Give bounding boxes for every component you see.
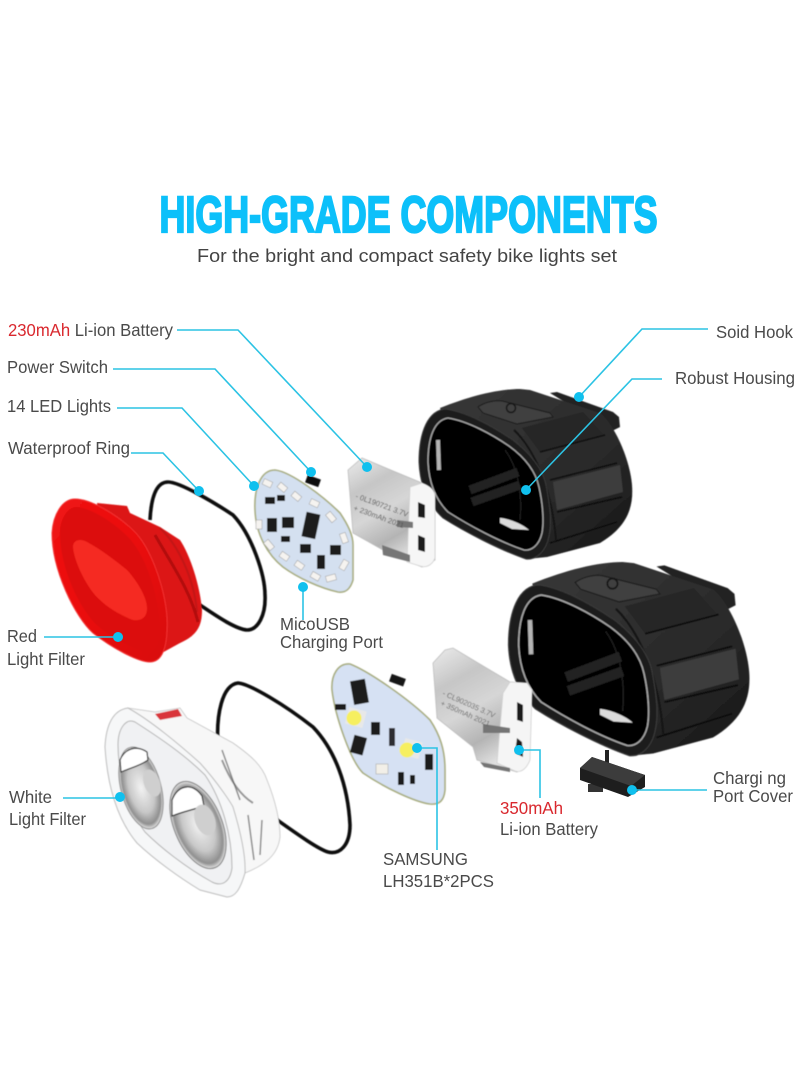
white light filter bbox=[105, 708, 280, 897]
label: 350mAh Li-ion Battery: 350mAh bbox=[500, 798, 563, 818]
label: Waterproof Ring: Waterproof Ring bbox=[8, 438, 130, 458]
label: Samsung LED: SAMSUNG bbox=[383, 849, 468, 869]
callout dots bbox=[113, 392, 637, 802]
circuit board: 14 LED bbox=[255, 470, 353, 592]
label: MicoUSB Charging Port bbox=[280, 614, 383, 652]
red light filter bbox=[52, 499, 202, 662]
waterproof ring: red light bbox=[150, 482, 265, 630]
housing: upper black bbox=[419, 389, 632, 559]
leader lines bbox=[44, 329, 708, 850]
label: Charging Port Cover: Port Cover bbox=[713, 786, 793, 806]
charging port cover bbox=[580, 750, 645, 797]
label: 14 LED Lights: 14 LED Lights bbox=[7, 396, 111, 416]
label: 350mAh Li-ion Battery bbox=[500, 798, 598, 839]
label: 230mAh Li-ion Battery: 230mAh Li-ion Battery bbox=[8, 320, 173, 340]
subtitle: For the bright and compact safety bike lights set bbox=[197, 245, 617, 266]
battery: 230mAh: + 230mAh 2021 bbox=[352, 503, 405, 530]
label: Red Light Filter: Red bbox=[7, 626, 37, 646]
label: MicoUSB Charging Port: MicoUSB bbox=[280, 614, 350, 634]
label: MicoUSB Charging Port: Charging Port bbox=[280, 632, 383, 652]
battery: 230mAh: - 0L190721 3.7V bbox=[354, 491, 410, 519]
label: Charging Port Cover bbox=[713, 768, 793, 806]
battery: 350mAh: + 350mAh 2021 bbox=[439, 699, 491, 728]
label: Robust Housing: Robust Housing bbox=[675, 368, 795, 388]
label: 350mAh Li-ion Battery: Li-ion Battery bbox=[500, 819, 598, 839]
label: Samsung LED: LH351B*2PCS bbox=[383, 871, 494, 891]
waterproof ring: white light bbox=[218, 683, 350, 853]
battery: 230mAh bbox=[348, 458, 435, 567]
label: White Light Filter bbox=[9, 787, 86, 829]
battery: 350mAh: - CL902035 3.7V bbox=[441, 689, 497, 720]
label: White Light Filter: White bbox=[9, 787, 52, 807]
label: Red Light Filter bbox=[7, 626, 85, 669]
label: Soid Hook: Soid Hook bbox=[716, 322, 793, 342]
housing: lower black bbox=[508, 562, 749, 756]
circuit board: Samsung LEDs bbox=[332, 664, 445, 804]
battery: 350mAh bbox=[433, 648, 532, 772]
label: Samsung LED bbox=[383, 849, 494, 891]
label: Power Switch: Power Switch bbox=[7, 357, 108, 377]
label: Red Light Filter: Light Filter bbox=[7, 649, 85, 669]
label: White Light Filter: Light Filter bbox=[9, 809, 86, 829]
label: Charging Port Cover: Chargi ng bbox=[713, 768, 786, 788]
